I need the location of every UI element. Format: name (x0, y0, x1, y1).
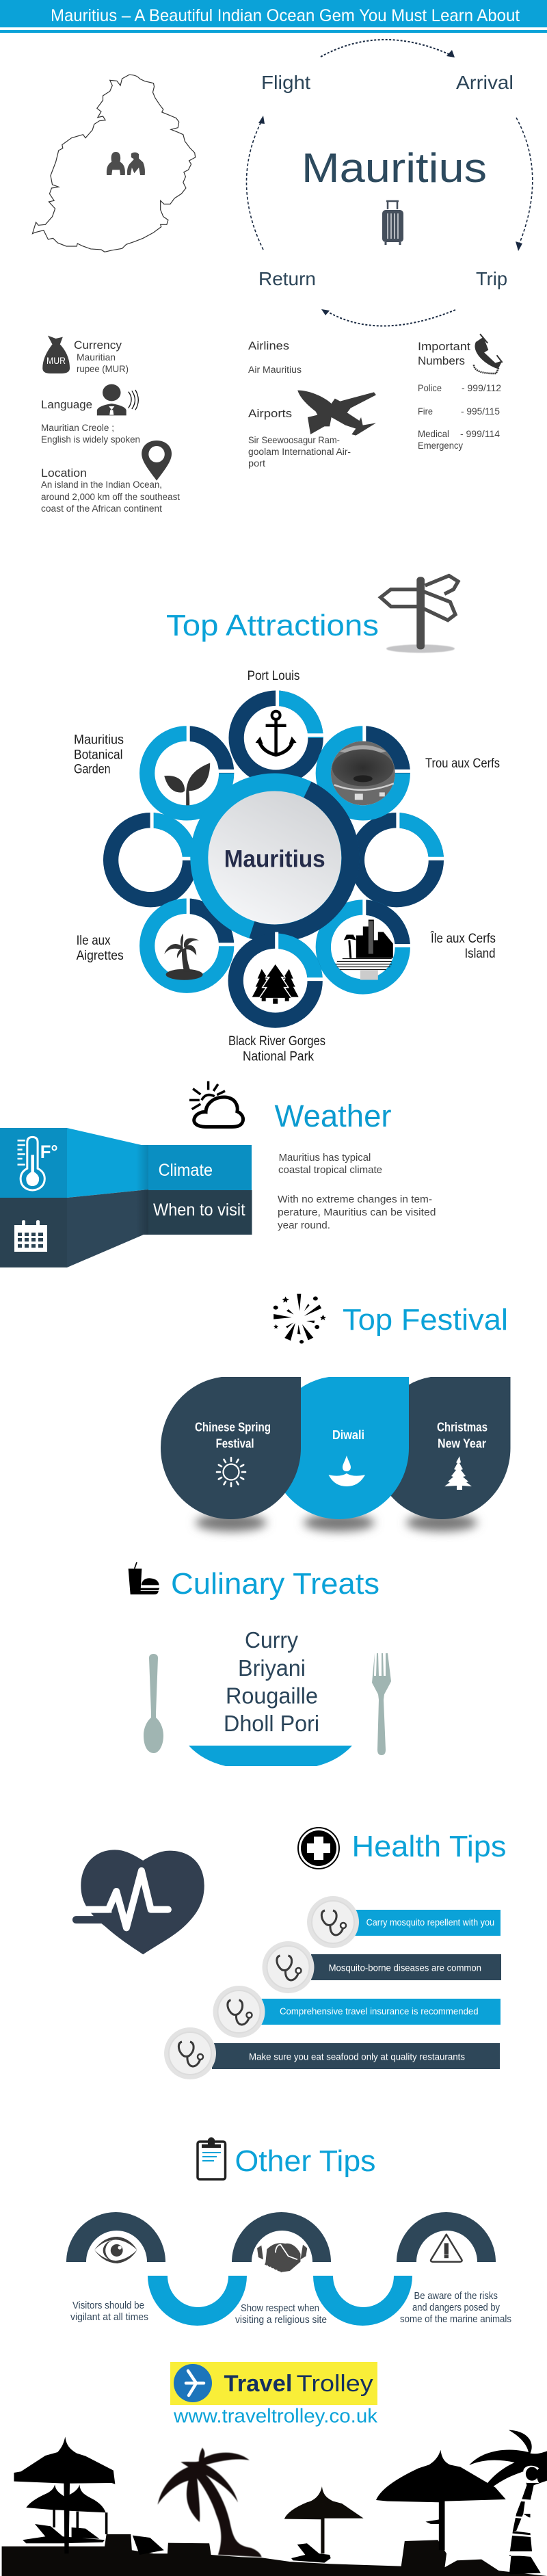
ring: empty right (357, 811, 445, 899)
icon: thermometer (18, 1137, 58, 1190)
arrowheads (258, 50, 522, 315)
weather text: Mauritius has typical (279, 1152, 371, 1164)
body: airport: Sir Seewoosagur Ram- (248, 435, 340, 445)
palm, right (469, 2430, 547, 2574)
label: Ile aux Cerfs Island: Island (465, 947, 495, 961)
text: tip 2: Show respect when (241, 2303, 319, 2314)
ring: Port Louis (237, 689, 325, 778)
text: tip 1: vigilant at all times (70, 2312, 148, 2323)
icon: christmas tree (444, 1456, 472, 1490)
label: Mauritius Botanical Garden: Mauritius (74, 733, 124, 748)
icon: fireworks (274, 1294, 326, 1343)
label: Port Louis: Port Louis (248, 669, 299, 683)
text: tip 1: Visitors should be (72, 2300, 144, 2311)
label: When to visit: When to visit (153, 1200, 245, 1220)
hub label: Mauritius (224, 845, 325, 873)
body: airport line 3: port (248, 458, 265, 469)
umbrella 3 (284, 2486, 364, 2553)
icon: map pin (142, 441, 172, 481)
text: tip 3 (400, 2291, 511, 2325)
body line 2: around 2,000 km off the southeast (41, 492, 180, 502)
arrow: return to flight (246, 120, 263, 250)
police number: - 999/112 (462, 383, 501, 393)
header banner (0, 0, 547, 33)
weather text: year round. (278, 1220, 330, 1231)
icon: medical cross (298, 1828, 339, 1869)
icon: plane (297, 391, 376, 436)
tip 4: Make sure you eat seafood only at quality restaurants (249, 2052, 465, 2062)
tip 1: Carry mosquito repellent with you (366, 1917, 494, 1928)
Dholl Pori: Dholl Pori (224, 1711, 319, 1736)
heading: Weather: Weather (275, 1099, 392, 1133)
label: Flight: Flight (261, 72, 310, 93)
heading: Language (41, 399, 92, 411)
U-shape 1 (148, 2276, 247, 2326)
icon: heart with pulse (76, 1850, 204, 1954)
icon: calendar (14, 1220, 47, 1252)
heading: Currency (74, 339, 122, 352)
icon: telephone (474, 334, 503, 373)
Curry: Curry (245, 1627, 298, 1653)
heading: Important (418, 341, 470, 353)
tip 3 (213, 1986, 501, 2038)
text: tip 2: visiting a religious site (235, 2315, 327, 2326)
other tips (66, 2212, 511, 2326)
logo: Travel Trolley (170, 2362, 377, 2405)
arch 3 (397, 2212, 496, 2262)
fold: blue (67, 1128, 148, 1198)
website URL: www.traveltrolley.co.uk (173, 2406, 378, 2428)
label: Ile aux Aigrettes: Ile aux (77, 934, 111, 948)
icon: clipboard (198, 2137, 226, 2179)
label: Black River Gorges National Park (228, 1034, 325, 1064)
icon: sun and cloud (189, 1081, 243, 1127)
label: Ile aux Aigrettes: Aigrettes (77, 949, 124, 963)
icon: signpost (381, 576, 458, 653)
icon: thermometer: F° (40, 1142, 58, 1162)
lounge chair (291, 2543, 331, 2563)
label: Trip: Trip (476, 268, 507, 289)
Rougaille: Rougaille (226, 1683, 318, 1709)
icon: handshake (257, 2243, 307, 2272)
facts: airlines and airports (248, 340, 376, 469)
umbrella 1 (14, 2436, 115, 2553)
heading line 2: Numbers (418, 355, 465, 367)
heading: Health Tips: Health Tips (351, 1830, 506, 1863)
emergency: Emergency (418, 441, 463, 451)
fire: Fire (418, 406, 433, 417)
body: airline: Air Mauritius (248, 365, 302, 375)
tip 3: Comprehensive travel insurance is recommended (280, 2006, 479, 2016)
label: Chinese Spring Festival (195, 1421, 271, 1451)
text: tip 3: Be aware of the risks (414, 2291, 498, 2302)
label: Chinese Spring Festival: Chinese Spring (195, 1421, 271, 1434)
umbrella poles (54, 2509, 107, 2534)
facts: location (41, 441, 180, 514)
text: tip 3: and dangers posed by (412, 2302, 501, 2313)
heading: Top Festival: Top Festival (343, 1303, 508, 1337)
icon: anchor (256, 711, 297, 756)
fragment (425, 2519, 440, 2524)
icon: trees (252, 964, 299, 1004)
umbrella 4 (376, 2450, 506, 2550)
icon: palm island (164, 934, 203, 980)
heading: Culinary Treats: Culinary Treats (171, 1567, 379, 1601)
umbrella 2 (26, 2484, 106, 2512)
body line 2: rupee (MUR) (77, 364, 129, 374)
weather text (278, 1152, 436, 1231)
ring: Trou aux Cerfs (323, 724, 412, 813)
label: Mauritius Botanical Garden: Garden (74, 762, 111, 776)
label: Black River Gorges National Park: Black River Gorges (228, 1034, 325, 1049)
label: Arrival: Arrival (456, 72, 513, 93)
label: Chinese Spring Festival: Festival (216, 1437, 254, 1451)
arch 1 (66, 2212, 165, 2262)
plate (189, 1746, 352, 1766)
tip 2 (263, 1941, 501, 1993)
panel: blue tab (0, 1128, 67, 1198)
logo mark (174, 2364, 212, 2402)
title: Mauritius – A Beautiful Indian Ocean Gem You Must Learn About (51, 6, 520, 25)
icon: people (107, 152, 145, 175)
map of Mauritius (32, 75, 196, 252)
facts: language (41, 384, 140, 445)
beach silhouette (2, 2430, 547, 2576)
label: Christmas New Year: Christmas (437, 1421, 488, 1434)
money bag label: MUR (46, 355, 66, 366)
body: Mauritian (77, 352, 116, 363)
body: airport line 2: goolam International Air- (248, 447, 351, 457)
label: Ile aux Aigrettes (77, 934, 124, 963)
drop shadows (196, 1514, 477, 1532)
body line 3: coast of the African continent (41, 503, 162, 514)
panel: When to visit (148, 1190, 252, 1235)
icon: stethoscope 4 (164, 2027, 216, 2079)
text: tip 3: some of the marine animals (400, 2314, 511, 2325)
ring: Black River Gorges (236, 932, 324, 1021)
icon: suitcase (382, 201, 403, 245)
facts: currency (42, 336, 129, 374)
Briyani: Briyani (238, 1655, 306, 1681)
label: Trou aux Cerfs: Trou aux Cerfs (425, 757, 500, 771)
drop: Diwali (269, 1377, 409, 1519)
deck chairs (23, 2524, 164, 2555)
logo word: Travel: Travel (224, 2371, 293, 2397)
travel cycle (246, 40, 533, 326)
facts: important numbers (418, 334, 503, 451)
ground and objects (2, 2534, 547, 2576)
weather text: coastal tropical climate (278, 1164, 382, 1176)
center hub (199, 783, 351, 934)
festivals (161, 1377, 511, 1532)
text: tip 1 (70, 2300, 148, 2323)
heading: Top Attractions: Top Attractions (166, 609, 379, 642)
weather text: perature, Mauritius can be visited (278, 1207, 436, 1218)
label: Ile aux Cerfs Island: Île aux Cerfs (430, 931, 496, 946)
heading: Other Tips: Other Tips (235, 2144, 376, 2178)
heading: Location (41, 467, 87, 479)
ring: Ile aux Aigrettes (147, 897, 235, 986)
fire number: - 995/115 (461, 406, 500, 417)
arrow: arrival to trip (516, 118, 533, 246)
health tips list (164, 1896, 501, 2079)
folded weather graphic (0, 1128, 252, 1267)
label: Christmas New Year (437, 1421, 488, 1451)
icon: stethoscope 3 (213, 1986, 265, 2038)
attractions wheel (74, 669, 500, 1064)
drop: Chinese Spring Festival (161, 1377, 301, 1519)
label: Climate: Climate (159, 1161, 213, 1180)
fold: navy (67, 1190, 148, 1267)
arrow: trip to return (327, 310, 455, 326)
icon: spoon (144, 1654, 163, 1753)
label: Mauritius Botanical Garden: Botanical (74, 748, 123, 762)
palm, centre (158, 2447, 262, 2557)
medical: Medical (418, 429, 449, 439)
label: Ile aux Cerfs Island (430, 931, 496, 961)
arch 2 (232, 2212, 331, 2262)
icon: money bag (42, 336, 70, 373)
panel: Climate (148, 1145, 252, 1190)
heading: Airlines: Airlines (248, 340, 289, 352)
logo word: Trolley: Trolley (297, 2371, 373, 2397)
icon: warning triangle (431, 2235, 462, 2262)
ring: empty left (111, 811, 199, 899)
panel: navy tab (0, 1198, 67, 1267)
label: Black River Gorges National Park: National Park (243, 1050, 314, 1064)
police: Police (418, 383, 442, 393)
arrow: flight to arrival (321, 40, 449, 57)
text: tip 2 (235, 2303, 327, 2326)
ring: Ile aux Cerfs (323, 899, 412, 986)
tip 2: Mosquito-borne diseases are common (329, 1963, 481, 1973)
label: Diwali: Diwali (332, 1428, 364, 1442)
icon: speaker (97, 384, 138, 415)
ring: Botanical Garden (147, 724, 235, 813)
food list (224, 1627, 319, 1736)
icon: stethoscope 2 (263, 1941, 315, 1993)
icon: sun (217, 1458, 245, 1486)
heading: Airports: Airports (248, 408, 292, 420)
body: An island in the Indian Ocean, (41, 479, 162, 490)
icon: eye (94, 2237, 137, 2263)
U-shape 2 (313, 2276, 412, 2326)
tip 4 (164, 2027, 500, 2079)
weather text: With no extreme changes in tem- (278, 1194, 432, 1205)
photo: crater (331, 741, 395, 805)
icon: fork (372, 1653, 391, 1755)
label: Christmas New Year: New Year (438, 1437, 486, 1451)
tip 1 (307, 1896, 501, 1948)
body: Mauritian Creole ; (41, 423, 114, 433)
label: Mauritius Botanical Garden (74, 733, 124, 776)
center title: Mauritius: Mauritius (302, 145, 487, 191)
photo: city (336, 919, 393, 980)
icon: plant (164, 763, 210, 805)
label: Return: Return (258, 268, 316, 289)
icon: diya lamp (328, 1456, 365, 1486)
medical number: - 999/114 (460, 429, 501, 439)
drop: Christmas New Year (373, 1377, 510, 1519)
icon: drink and burger (129, 1562, 159, 1594)
icon: stethoscope 1 (307, 1896, 359, 1948)
body line 2: English is widely spoken (41, 434, 140, 445)
